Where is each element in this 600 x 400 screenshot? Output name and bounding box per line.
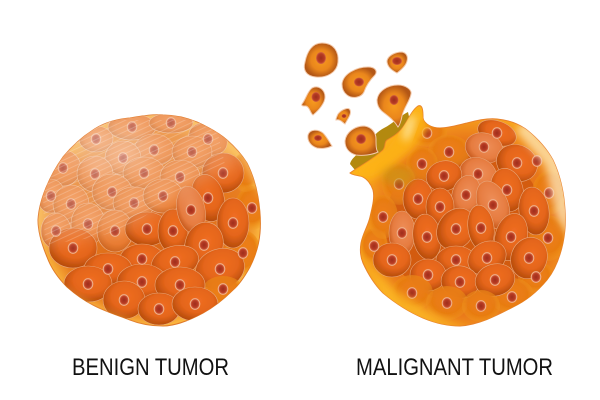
malignant tumor body bbox=[350, 106, 565, 326]
floating cell 5 bbox=[302, 87, 325, 115]
floating cell 8 bbox=[345, 126, 378, 155]
floating cell 2 bbox=[342, 67, 376, 97]
label: malignant tumor: MALIGNANT TUMOR bbox=[356, 354, 553, 381]
floating cell 1 bbox=[304, 43, 338, 77]
benign tumor nuclei bbox=[46, 117, 257, 315]
detached cancer cells bbox=[302, 43, 411, 155]
malignant tumor nuclei bbox=[369, 127, 554, 312]
dark olive shadow behind rupture bbox=[350, 112, 412, 176]
benign tumor body bbox=[38, 115, 260, 326]
floating cell 3 bbox=[387, 52, 407, 73]
benign tumor illustration bbox=[38, 114, 261, 326]
malignant tumor highlights bbox=[350, 104, 570, 330]
benign tumor pale highlight bbox=[38, 114, 258, 325]
floating cell 7 bbox=[308, 130, 332, 148]
malignant tumor cells bbox=[360, 115, 567, 322]
benign tumor cells bbox=[37, 113, 269, 325]
label: benign tumor: BENIGN TUMOR bbox=[72, 354, 229, 381]
malignant tumor illustration bbox=[350, 104, 570, 330]
floating cell 6 bbox=[336, 109, 350, 124]
floating cell 4 bbox=[377, 85, 411, 127]
